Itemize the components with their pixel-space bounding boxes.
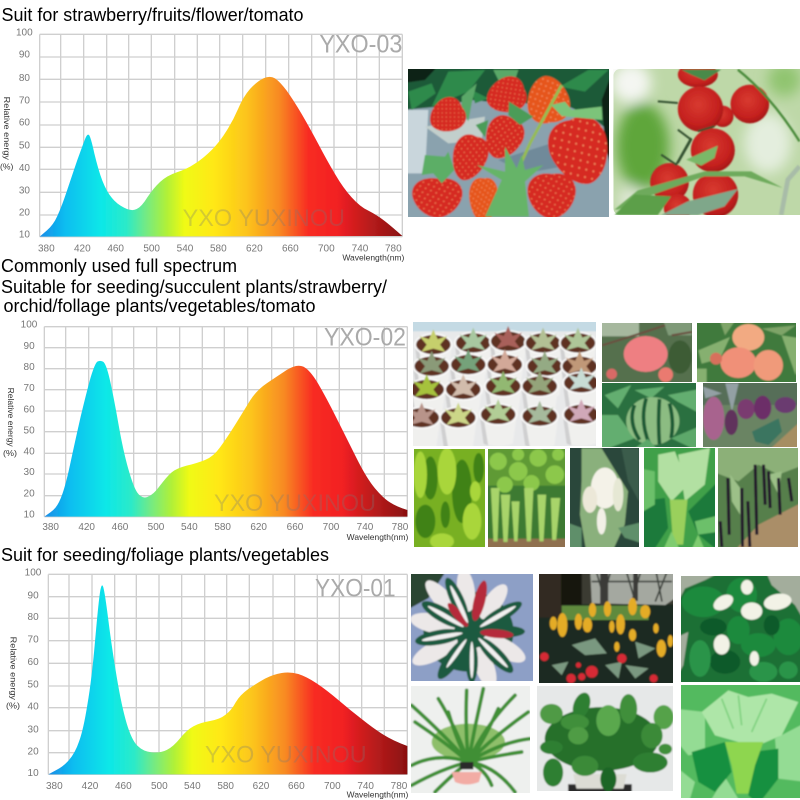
x axis values: 580 [217, 781, 234, 792]
y axis values: 60 [19, 118, 30, 129]
x axis values: 540 [181, 522, 198, 533]
photo: celery [488, 449, 565, 547]
x axis values: 420 [74, 244, 91, 255]
x axis values: 780 [385, 244, 402, 255]
y axis title: (%) [3, 448, 17, 458]
x axis values: 620 [246, 244, 263, 255]
watermark: YXO YUXINOU [183, 205, 345, 232]
x axis values: 660 [287, 522, 304, 533]
x axis values [42, 522, 409, 533]
y axis values: 70 [28, 634, 39, 645]
y axis values: 20 [28, 746, 39, 757]
y axis values [16, 28, 33, 241]
x axis values: 500 [148, 522, 165, 533]
x axis values: 740 [357, 781, 374, 792]
y axis values: 30 [28, 724, 39, 735]
x axis values: 460 [112, 522, 129, 533]
model label: YXO-01 [315, 576, 396, 603]
y axis values: 50 [19, 140, 30, 151]
photo: peaches [697, 323, 796, 382]
grid lines [40, 34, 402, 237]
x axis values: 700 [318, 244, 335, 255]
spectrum curve [44, 361, 407, 517]
y axis values: 10 [19, 230, 30, 241]
y axis title [0, 97, 14, 171]
x axis values [38, 244, 402, 255]
heading: section 1 seeding: Suit for seeding/foliage plants/vegetables [1, 545, 329, 565]
heading: section 2 suitability line 2: orchid/follage plants/vegetables/tomato [4, 296, 316, 316]
y axis values: 10 [24, 509, 35, 520]
grid lines [44, 327, 407, 517]
x axis values: 700 [324, 781, 341, 792]
watermark: YXO YUXINOU [214, 490, 376, 517]
x axis values: 460 [115, 781, 132, 792]
y axis title: Relative energy [9, 637, 19, 701]
y axis title: Relative energy [6, 388, 16, 448]
photo: peace lily [681, 576, 800, 682]
photo: cauliflower [570, 448, 639, 547]
y axis values: 40 [19, 163, 30, 174]
photo: strawberries [408, 69, 609, 217]
grid lines [48, 574, 407, 774]
y axis values [21, 320, 38, 520]
x axis values: 660 [282, 244, 299, 255]
photo: calathea [411, 574, 533, 681]
x axis values [46, 781, 408, 792]
x axis values: 740 [357, 522, 374, 533]
y axis title: Relative energy [2, 97, 12, 161]
x axis values: 620 [253, 781, 270, 792]
x axis values: 580 [214, 522, 231, 533]
y axis values: 40 [24, 446, 35, 457]
photo: yellow shrimp plant garden [539, 574, 673, 683]
photo: bok choy close-up [681, 685, 800, 798]
x axis values: 740 [352, 244, 369, 255]
y axis values: 20 [19, 208, 30, 219]
photo: grapes [703, 383, 797, 447]
x axis values: 780 [391, 781, 408, 792]
y axis values: 50 [24, 425, 35, 436]
photo: succulents in white pots [413, 322, 596, 446]
x axis values: 500 [143, 244, 160, 255]
x axis values: 700 [323, 522, 340, 533]
x axis values: 460 [107, 244, 124, 255]
x axis values: 540 [184, 781, 201, 792]
photo: lettuce [414, 449, 485, 547]
x axis values: 420 [82, 781, 99, 792]
x axis values: 580 [210, 244, 227, 255]
y axis values: 40 [28, 701, 39, 712]
y axis values: 100 [25, 568, 42, 579]
y axis values: 80 [19, 73, 30, 84]
heading: section 3 strawberry: Suit for strawberry/fruits/flower/tomato [2, 5, 304, 25]
x axis values: 380 [46, 781, 63, 792]
chart: YXO-03 spectrum [0, 28, 405, 263]
x axis values: 420 [78, 522, 95, 533]
x axis values: 500 [151, 781, 168, 792]
y axis values: 10 [28, 768, 39, 779]
y axis values: 60 [24, 404, 35, 415]
photo: hanging eggplants [718, 448, 798, 547]
y axis values: 90 [28, 590, 39, 601]
x axis values: 780 [392, 522, 409, 533]
photo: watermelon [602, 383, 696, 447]
y axis values: 70 [19, 95, 30, 106]
y axis title [6, 637, 20, 711]
x axis title: Wavelength(nm) [342, 253, 405, 263]
y axis values: 100 [16, 28, 33, 39]
y axis values: 60 [28, 657, 39, 668]
y axis values: 70 [24, 383, 35, 394]
y axis values: 100 [21, 320, 38, 331]
y axis values: 90 [24, 341, 35, 352]
y axis values: 20 [24, 489, 35, 500]
y axis values: 80 [28, 612, 39, 623]
chart: YXO-02 spectrum [3, 320, 409, 542]
photo: apple on tree [602, 323, 692, 382]
x axis title: Wavelength(nm) [347, 789, 409, 799]
x axis values: 620 [250, 522, 267, 533]
y axis values: 80 [24, 362, 35, 373]
chart: YXO-01 spectrum [6, 568, 409, 799]
x axis values: 540 [177, 244, 194, 255]
x axis values: 380 [42, 522, 59, 533]
watermark: YXO YUXINOU [205, 742, 367, 769]
photo: spider plant [411, 686, 530, 793]
x axis values: 660 [288, 781, 305, 792]
y axis values: 30 [24, 467, 35, 478]
heading: section 2 common: Commonly used full spectrum [1, 256, 237, 276]
y axis values: 90 [19, 50, 30, 61]
y axis values: 30 [19, 185, 30, 196]
x axis values: 380 [38, 244, 55, 255]
y axis values [25, 568, 42, 779]
photo: pothos in white pot [537, 686, 673, 791]
y axis title [3, 388, 17, 458]
photo: cherry tomatoes [613, 69, 800, 215]
photo: bok choy [644, 448, 715, 547]
spectrum curve [40, 77, 402, 237]
model label: YXO-03 [319, 31, 402, 58]
heading: section 2 suitability line 1: Suitable for seeding/succulent plants/strawberry/ [1, 277, 387, 297]
y axis values: 50 [28, 680, 39, 691]
y axis title: (%) [6, 701, 20, 711]
spectrum curve [48, 585, 407, 774]
x axis title: Wavelength(nm) [347, 532, 409, 542]
model label: YXO-02 [324, 325, 406, 352]
y axis title: (%) [0, 161, 14, 171]
